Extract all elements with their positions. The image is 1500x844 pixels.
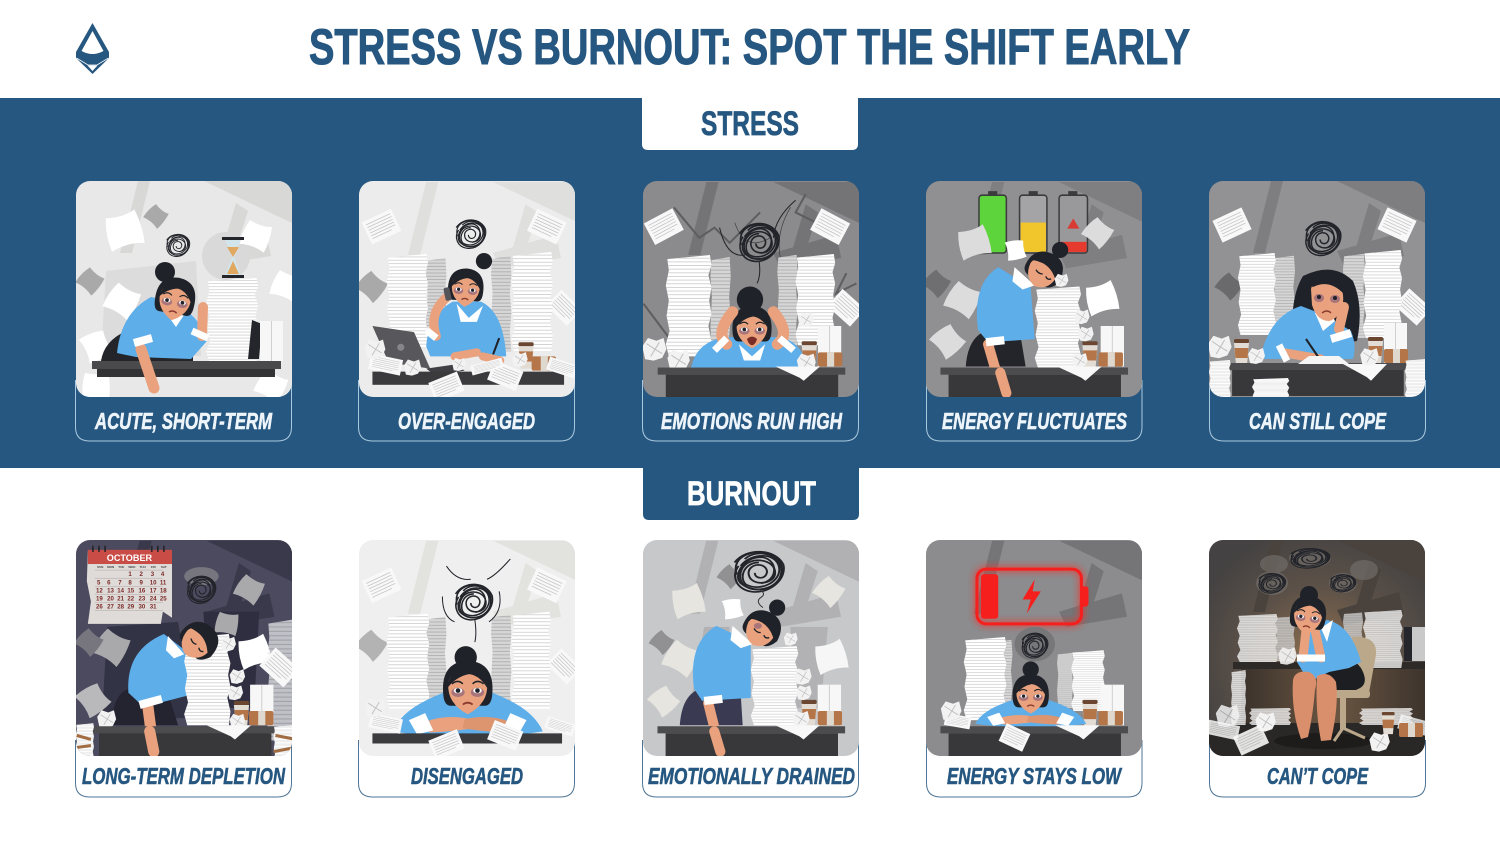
- calendar: 20: [107, 596, 115, 603]
- scene background: [359, 181, 575, 397]
- calendar: 3: [151, 571, 155, 578]
- paper stack: [1035, 286, 1081, 368]
- desk: [658, 368, 846, 397]
- scene background: [926, 181, 1142, 397]
- calendar: 1: [128, 571, 132, 578]
- calendar: 11: [160, 579, 167, 586]
- hanging paper: [1057, 367, 1102, 381]
- panel: acute, short-term: [75, 181, 304, 441]
- calendar: 28: [117, 604, 125, 611]
- paper stacks: [387, 252, 553, 351]
- calendar: 7: [118, 579, 122, 586]
- scribble and smoke: [1014, 627, 1055, 661]
- scene background: [355, 538, 588, 766]
- paper stack: [751, 646, 798, 725]
- batteries: [979, 191, 1087, 253]
- calendar: 21: [117, 596, 125, 603]
- desk: [940, 368, 1128, 401]
- hanging paper: [775, 367, 820, 381]
- crumpled paper: [784, 633, 812, 727]
- paper stacks: [666, 254, 835, 357]
- low battery icon: [977, 569, 1088, 624]
- woman: [966, 242, 1069, 393]
- woman: [680, 600, 787, 752]
- woman: [691, 286, 806, 368]
- paper stacks: [1238, 250, 1402, 338]
- calendar: SUN: [97, 565, 103, 569]
- desk papers: [1208, 336, 1427, 408]
- illustration: woman slumped with three batteries: [926, 181, 1142, 397]
- calendar: 22: [127, 596, 135, 603]
- crumpled paper: [642, 313, 816, 371]
- heading tab: stress: [642, 98, 858, 150]
- calendar: 23: [139, 596, 146, 603]
- smoke and scribbles: [1256, 548, 1378, 595]
- hanging paper: [775, 725, 820, 739]
- calendar: 6: [107, 579, 111, 586]
- heading tab: burnout: [643, 468, 859, 520]
- scene background: [74, 538, 302, 766]
- desk: [92, 361, 281, 377]
- loose papers: [354, 209, 582, 326]
- illustration: woman resting head at desk with hourglass: [75, 181, 304, 404]
- flying papers: [921, 215, 1120, 360]
- laptop: [372, 326, 465, 375]
- coffee cups: [518, 342, 556, 371]
- scribble: [1306, 222, 1341, 256]
- card outline: [76, 740, 292, 797]
- calendar: 18: [160, 587, 167, 594]
- calendar: 4: [161, 571, 165, 578]
- calendar: OCTOBER: [107, 553, 153, 563]
- calendar: 5: [97, 579, 101, 586]
- woman: [1288, 586, 1365, 741]
- calendar: 25: [160, 596, 167, 603]
- bottom paper piles: [76, 723, 296, 764]
- panel: emotionally drained: [640, 538, 868, 797]
- loose papers: [1212, 207, 1432, 326]
- paper stack: [206, 278, 258, 362]
- hanging hand: [150, 731, 154, 752]
- calendar: 16: [139, 587, 146, 594]
- caption: ACUTE, SHORT-TERM: [94, 408, 273, 434]
- woman: [426, 253, 506, 360]
- calendar: 2: [140, 571, 144, 578]
- panel: energy fluctuates: [921, 179, 1154, 441]
- panel: emotions run high: [640, 179, 869, 441]
- illustration: drained woman leaning on papers: [640, 538, 868, 766]
- desk: [940, 726, 1128, 760]
- calendar: 9: [140, 579, 144, 586]
- caption: CAN’T COPE: [1267, 763, 1368, 789]
- woman: [1260, 270, 1360, 361]
- panel: energy stays low: [923, 538, 1154, 797]
- scene background: [640, 538, 868, 766]
- caption: ENERGY FLUCTUATES: [942, 408, 1127, 434]
- paper stacks: [1231, 610, 1413, 725]
- calendar: 26: [96, 604, 103, 611]
- crumpled paper: [97, 637, 245, 728]
- hanging arm: [134, 338, 154, 388]
- calendar: 30: [139, 604, 146, 611]
- binder: [1404, 627, 1425, 661]
- crumpled paper and floor items: [1206, 647, 1429, 756]
- illustration: woman with glowing low battery: [923, 538, 1154, 766]
- hanging hand: [714, 731, 720, 752]
- desk: [1233, 662, 1425, 723]
- flying papers: [75, 202, 304, 404]
- calendar: 15: [127, 587, 135, 594]
- loose papers: [354, 567, 582, 685]
- paper stacks: [964, 637, 1105, 720]
- caption: OVER-ENGAGED: [398, 408, 535, 434]
- card outline: [358, 740, 574, 797]
- card outline: [1210, 740, 1426, 797]
- scribble: [456, 220, 486, 248]
- desk papers: [368, 340, 575, 397]
- caption: ENERGY STAYS LOW: [947, 763, 1123, 789]
- calendar: MON: [107, 565, 114, 569]
- calendar: [87, 546, 172, 624]
- woman head: [172, 614, 226, 668]
- calendar: 19: [96, 596, 103, 603]
- card outline: [642, 740, 858, 797]
- scribble: [167, 234, 190, 256]
- woman: [975, 661, 1086, 727]
- logo icon: [76, 23, 109, 74]
- calendar: SAT: [161, 565, 167, 569]
- panel: long-term depletion: [74, 538, 302, 797]
- calendar: 10: [150, 579, 157, 586]
- calendar: 14: [117, 587, 125, 594]
- calendar: FRI: [151, 565, 156, 569]
- calendar: 31: [150, 604, 157, 611]
- calendar: 13: [107, 587, 115, 594]
- folders: [248, 320, 283, 361]
- card outline: [358, 380, 574, 441]
- hanging hand: [1000, 373, 1006, 393]
- desk: [657, 726, 845, 760]
- folders and coffee: [1082, 326, 1124, 368]
- loose papers: [644, 208, 865, 327]
- scene background: [76, 181, 292, 397]
- card outline: [642, 380, 858, 441]
- calendar: WED: [128, 565, 136, 569]
- desk: [1224, 363, 1411, 396]
- woman: [393, 646, 543, 736]
- desk: [91, 726, 278, 760]
- card outline: [926, 740, 1142, 797]
- stress band: [0, 98, 1500, 468]
- scribble and smoke: [184, 567, 219, 603]
- flying papers: [646, 562, 850, 718]
- caption: EMOTIONALLY DRAINED: [648, 763, 855, 789]
- heading tab: stress: STRESS: [701, 105, 799, 143]
- paper stack: [184, 634, 230, 725]
- caption: DISENGAGED: [411, 763, 523, 789]
- illustration: tired woman writing at desk: [1208, 181, 1432, 408]
- woman: [101, 262, 208, 361]
- panel: can't cope: [1206, 540, 1429, 797]
- scribble: [442, 559, 510, 642]
- calendar: 12: [96, 587, 103, 594]
- crumpled paper: [1005, 239, 1094, 368]
- illustration: woman crying in chair in dark office: [1206, 540, 1429, 756]
- folders and coffee: [802, 326, 842, 368]
- folders and coffee: [234, 685, 273, 727]
- hourglass: [222, 237, 244, 278]
- scene background: [1209, 540, 1425, 756]
- desk: [372, 372, 564, 385]
- desk papers: [941, 701, 1100, 752]
- calendar: 17: [150, 587, 157, 594]
- caption: EMOTIONS RUN HIGH: [661, 408, 842, 434]
- scene background: [1209, 181, 1425, 397]
- folders and coffee: [801, 685, 842, 726]
- chair: [1332, 637, 1376, 741]
- card outline: [76, 380, 292, 441]
- scene background: [923, 538, 1154, 766]
- paper stacks: [387, 612, 551, 710]
- desk papers: [365, 698, 576, 760]
- folders and coffee: [1082, 685, 1124, 726]
- illustration: woman on phone at laptop: [359, 181, 575, 397]
- panel: can still cope: [1208, 181, 1432, 441]
- panel: over-engaged: [354, 179, 588, 441]
- panel: disengaged: [354, 538, 588, 797]
- calendar: 27: [107, 604, 115, 611]
- calendar: 29: [127, 604, 135, 611]
- illustration: crying woman holding head: [643, 181, 859, 397]
- woman body: [111, 634, 190, 752]
- calendar: TUE: [118, 565, 124, 569]
- calendar: 8: [128, 579, 132, 586]
- desk: [372, 733, 562, 744]
- illustration: woman with head on folded arms: [354, 538, 588, 766]
- card outline: [1210, 380, 1426, 441]
- calendar: 24: [150, 596, 157, 603]
- hanging paper: [206, 725, 251, 739]
- calendar: THU: [140, 565, 146, 569]
- caption: LONG-TERM DEPLETION: [82, 763, 285, 789]
- illustration: exhausted woman with calendar: [74, 538, 302, 766]
- scribble: [735, 552, 784, 608]
- title: STRESS VS BURNOUT: SPOT THE SHIFT EARLY: [309, 19, 1190, 75]
- heading tab: burnout: BURNOUT: [687, 475, 816, 513]
- card outline: [926, 380, 1142, 441]
- coffee and folders: [1234, 323, 1408, 365]
- scribble: [720, 200, 796, 283]
- flying papers and right stack: [74, 572, 300, 740]
- caption: CAN STILL COPE: [1249, 408, 1386, 434]
- scene background: [643, 181, 859, 397]
